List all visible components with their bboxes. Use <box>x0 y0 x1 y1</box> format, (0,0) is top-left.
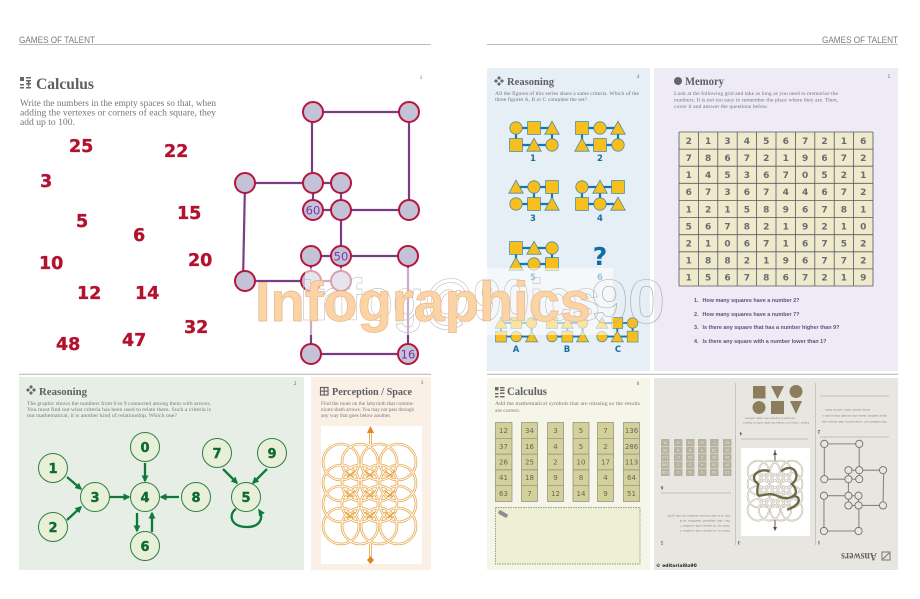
figure labels: C <box>615 345 621 355</box>
instructions: You must find out what criteria has been used to relate them. Such a criteria is <box>27 406 211 413</box>
node numbers: 7 <box>212 447 222 462</box>
number columns: 34 <box>525 427 534 435</box>
answer 6 table: 2 <box>701 455 703 459</box>
heading: Calculus: Calculus <box>36 76 94 93</box>
page number: 6 <box>637 382 640 387</box>
answer 6 table: 2 <box>677 463 679 467</box>
panel: perception and space <box>311 377 431 570</box>
page number: 4 <box>637 75 640 80</box>
figure 3 <box>509 180 559 210</box>
figure 2 <box>575 121 625 151</box>
figure labels: 4 <box>597 214 603 224</box>
figure labels <box>513 154 621 355</box>
questions: 2. <box>694 312 699 318</box>
figure 1 <box>510 121 559 151</box>
number columns: 51 <box>627 490 636 498</box>
questions: Is there any square with a number lower than 1? <box>702 339 826 345</box>
heading: Calculus: Calculus <box>507 386 547 398</box>
loose red numbers: 48 <box>56 335 80 355</box>
number grid: 1215896781 <box>686 205 866 215</box>
number columns: 136 <box>625 427 639 435</box>
panel: reasoning graph <box>19 377 304 570</box>
number columns: 7 <box>603 427 608 435</box>
figure labels: 3 <box>530 214 536 224</box>
number columns: 12 <box>499 427 508 435</box>
answer 6 table: 16 <box>712 463 716 467</box>
answer 6 table: 41 <box>725 448 729 452</box>
answer 5 text: There are 19 squares with a number 7 <box>680 524 730 528</box>
answer 6 table: 37 <box>725 463 729 467</box>
answer 6 table: 136 <box>662 470 668 474</box>
figure labels: 1 <box>530 154 536 164</box>
number columns: 17 <box>601 458 610 466</box>
instructions <box>321 401 414 419</box>
number columns: 9 <box>553 474 558 482</box>
instructions: Add the mathematical symbols that are missing so the results <box>495 401 640 407</box>
node numbers: 9 <box>267 447 277 462</box>
page number: 3 <box>421 381 424 386</box>
number columns: 8 <box>579 474 583 482</box>
squares graph <box>235 102 419 364</box>
number columns: 25 <box>525 458 534 466</box>
questions: How many squares have a number 2? <box>702 298 800 304</box>
instructions: numbers. It is not too easy to remember the place where they are. Then, <box>674 98 839 104</box>
answer 6 table: 8 <box>689 448 691 452</box>
loose red numbers: 6 <box>133 226 145 246</box>
dashed working box <box>496 508 640 564</box>
loose red numbers: 22 <box>164 142 188 162</box>
number grid: 1567867219 <box>686 274 866 284</box>
answer number labels: 1 <box>817 539 820 545</box>
answer 6 table: 14 <box>688 440 692 444</box>
answer 2 text: those numbers made with straight lines point to <box>822 414 887 418</box>
number nodes <box>38 432 286 560</box>
answer 6 table: 7 <box>713 440 715 444</box>
instructions: adding the vertexes or corners of each square, they <box>20 108 216 118</box>
node numbers: 0 <box>140 441 150 456</box>
icon: reasoning diamonds <box>494 76 504 86</box>
answer 3 labyrinth <box>741 448 810 536</box>
panel: reasoning figures <box>487 68 650 371</box>
number columns: 113 <box>625 458 638 466</box>
heading: Perception / Space: Perception / Space <box>332 386 412 398</box>
answer 6 table: 12 <box>700 440 704 444</box>
instructions <box>674 90 839 110</box>
number columns: 26 <box>499 458 508 466</box>
number columns: 7 <box>527 490 532 498</box>
arrows <box>67 463 267 532</box>
figure 5 <box>509 241 558 270</box>
option A <box>495 317 538 342</box>
heading: Memory: Memory <box>685 76 724 88</box>
instructions: nicate sboth arrows. You may not pass through <box>321 407 414 413</box>
instructions: three figures A, B or C complete the set? <box>495 96 588 103</box>
number grid: 1453670521 <box>686 171 866 181</box>
icon: reasoning diamonds <box>26 385 36 395</box>
instructions: not mathematical, it is another kind of relationship. Which one? <box>27 412 178 419</box>
loose red numbers <box>39 137 212 355</box>
option B <box>547 317 589 342</box>
answer 5 text: No, 0 is the lowest number in the grid <box>667 513 730 518</box>
number columns: 41 <box>499 474 508 482</box>
answer 6 table: 63 <box>725 440 729 444</box>
answer number labels: 3 <box>737 539 740 545</box>
figure labels: B <box>564 345 570 355</box>
answer 6 table <box>661 439 732 476</box>
option C <box>596 317 638 342</box>
node numbers: 1 <box>48 462 58 477</box>
squares graph: 60 <box>306 204 320 218</box>
instructions: All the figures of this series share a same criteria. Which of the <box>495 90 640 97</box>
panel: answers <box>654 378 898 570</box>
answer 6 table: 26 <box>725 455 729 459</box>
loose red numbers: 5 <box>76 212 88 232</box>
loose red numbers: 14 <box>135 284 159 304</box>
instructions <box>495 90 640 103</box>
answer number labels: 2 <box>817 428 820 434</box>
loose red numbers: 20 <box>188 251 212 271</box>
answer 2 text: those made with curved lines <box>824 408 870 412</box>
icon: answers <box>882 552 890 560</box>
instructions: are correct. <box>495 408 521 414</box>
squares graph: 50 <box>334 250 348 264</box>
number grid: 6736744672 <box>686 188 866 198</box>
number columns: 12 <box>551 490 560 498</box>
answer 6 table: 9 <box>677 440 679 444</box>
answer 4 text: Figure 1 does not contain the same order of figures <box>742 421 809 425</box>
header: left page: GAMES OF TALENT <box>19 35 95 45</box>
watermark: Infographics90: 90 <box>591 268 665 337</box>
icon: pencil <box>498 510 508 518</box>
instructions: add up to 100. <box>20 117 75 128</box>
questions: 1. <box>694 298 699 304</box>
answer 6 table: 5 <box>689 470 691 474</box>
panel: calculus puzzle 1 <box>20 76 423 364</box>
number grid: 1882196772 <box>686 257 866 267</box>
answer 6 table: 12 <box>725 470 729 474</box>
node numbers: 5 <box>241 491 251 506</box>
answer 6 table: 5 <box>689 463 691 467</box>
icon: memory <box>674 77 682 85</box>
answer 6 table: 286 <box>662 463 668 467</box>
answer 6 table: 113 <box>662 455 668 459</box>
number columns: 3 <box>553 427 558 435</box>
icon: perception square <box>320 388 328 395</box>
answer 6 table: 17 <box>676 455 680 459</box>
number columns: 18 <box>525 474 534 482</box>
number columns: 5 <box>579 443 583 451</box>
instructions <box>495 401 640 414</box>
answer 1 graph <box>820 440 887 535</box>
instructions: Write the numbers in the empty spaces so that, when <box>20 98 216 109</box>
answer 6 table: 9 <box>701 448 703 452</box>
number columns: 2 <box>603 443 608 451</box>
page number: 1 <box>420 76 423 81</box>
number columns: 286 <box>625 443 639 451</box>
number columns: 5 <box>579 427 583 435</box>
node numbers: 6 <box>140 540 150 555</box>
loose red numbers: 10 <box>39 254 63 274</box>
figure labels: A <box>513 345 520 355</box>
answer 5 text: There are 14 squares with a number 2 <box>680 529 730 533</box>
answer number labels: 4 <box>739 430 742 436</box>
loose red numbers: 25 <box>69 137 93 157</box>
node numbers: 2 <box>48 521 58 536</box>
answer 4 text: because it repeats the same pattern <box>745 416 795 420</box>
number grid: 2134567216 <box>686 137 866 147</box>
loose red numbers: 3 <box>40 172 52 192</box>
answer 4 text <box>742 416 809 425</box>
loose red numbers: 15 <box>177 204 201 224</box>
node numbers: 4 <box>140 491 150 506</box>
number grid <box>679 132 873 286</box>
number columns: 4 <box>603 474 608 482</box>
heading: Reasoning: Reasoning <box>39 386 87 398</box>
figure labels: 5 <box>530 273 536 283</box>
panel: calculus puzzle 6 <box>487 378 650 570</box>
node numbers: 3 <box>90 491 100 506</box>
questions: 3. <box>694 325 699 331</box>
questions: Is there any square that has a number higher than 9? <box>702 325 840 331</box>
questions <box>694 298 840 345</box>
number columns: 14 <box>577 490 586 498</box>
instructions: Find the route on the labyrinth that commu- <box>321 401 414 407</box>
watermark: Infographics90: Infographics <box>255 270 591 333</box>
number columns: 63 <box>499 490 508 498</box>
answer 2 text: The numbers are connected by their shapes and <box>822 420 887 424</box>
instructions: The graphic shows the numbers from 0 to 9 connected among them with arrows. <box>27 400 212 407</box>
answer 5 text <box>667 513 730 533</box>
number columns: 9 <box>603 490 608 498</box>
figure 4 <box>576 180 625 210</box>
watermark: Infographics90: Infog@90ics <box>300 268 600 333</box>
question mark: ? <box>593 242 607 271</box>
page number: 2 <box>294 382 297 387</box>
answer 6 table: 10 <box>688 455 692 459</box>
number columns: 64 <box>627 474 636 482</box>
number columns: 4 <box>553 443 558 451</box>
answer shapes <box>752 385 802 414</box>
answer number labels: 6 <box>660 484 663 490</box>
number columns: 10 <box>577 458 585 466</box>
instructions <box>20 98 216 128</box>
answer number labels <box>660 428 820 545</box>
answer 6 table: 7 <box>677 470 679 474</box>
figure labels: 6 <box>597 273 603 283</box>
number grid: 7867219672 <box>686 154 866 164</box>
loose red numbers: 47 <box>122 331 146 351</box>
instructions: Look at the following grid and take as long as you need to memorize the <box>674 90 839 97</box>
number columns: 16 <box>525 443 534 451</box>
heading: Reasoning: Reasoning <box>507 76 554 88</box>
number grid: 5678219210 <box>686 222 866 232</box>
answer 6 table: 64 <box>663 448 667 452</box>
questions: How many squares have a number 7? <box>702 312 800 318</box>
number columns <box>496 422 640 502</box>
answer 6 table: 25 <box>712 455 716 459</box>
watermark wash <box>305 268 613 335</box>
answer 5 text: No, the highest number is 9 <box>679 518 730 523</box>
heading: Answers, upside down: Answers <box>841 550 877 564</box>
loose red numbers: 12 <box>77 284 101 304</box>
number columns: 37 <box>499 443 508 451</box>
node numbers <box>48 441 277 555</box>
credit: © editorial8o90 <box>656 563 697 569</box>
column dividers <box>736 383 816 545</box>
labyrinth <box>321 426 422 564</box>
loose red numbers: 32 <box>184 318 208 338</box>
answer 6 table: 18 <box>712 448 716 452</box>
instructions: any way that goes below another. <box>321 413 392 419</box>
icon: math symbols <box>495 387 504 397</box>
node numbers: 8 <box>191 491 201 506</box>
questions: 4. <box>694 339 699 345</box>
number grid: 2106716752 <box>686 240 866 250</box>
answer 6 table: 51 <box>663 440 667 444</box>
number columns: 2 <box>553 458 558 466</box>
answer 6 table: 4 <box>701 463 703 467</box>
panel: memory <box>654 68 898 371</box>
instructions: cover it and answer the questions below. <box>674 104 769 110</box>
figure labels: 2 <box>597 154 603 164</box>
icon: math symbols <box>20 77 31 88</box>
squares graph: 16 <box>401 348 415 362</box>
page number: 5 <box>888 75 891 80</box>
instructions <box>27 400 212 419</box>
answer 6 table: 4 <box>677 448 679 452</box>
answer number labels: 5 <box>660 539 663 545</box>
header: right page: GAMES OF TALENT <box>822 35 898 45</box>
answer 6 table: 34 <box>712 470 716 474</box>
answer 2 text <box>822 408 887 424</box>
answer 6 table: 3 <box>701 470 703 474</box>
